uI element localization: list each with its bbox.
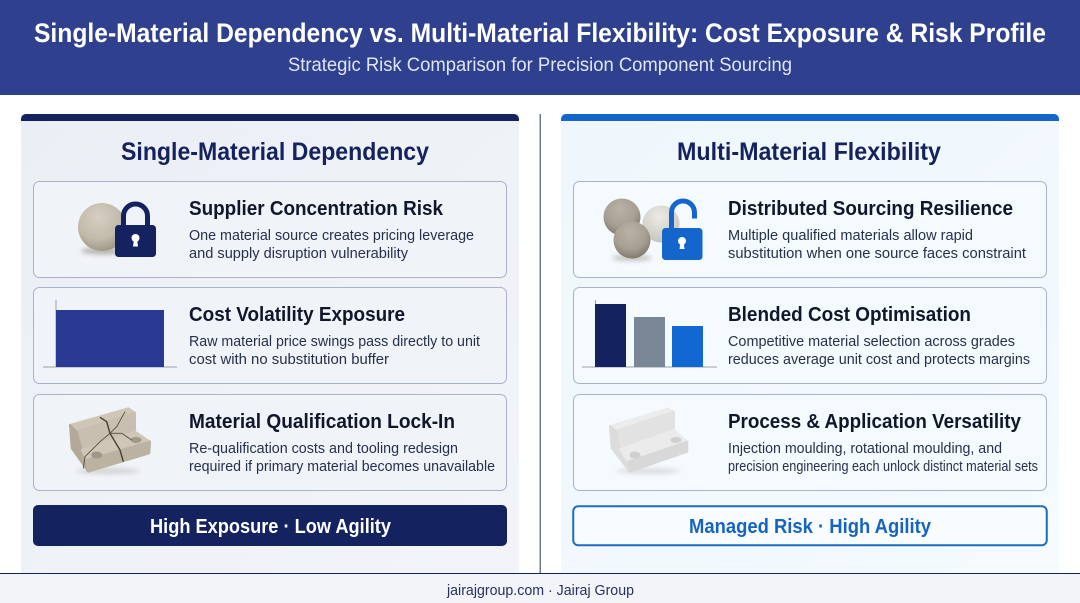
footer: jairajgroup.com · Jairaj Group [446, 583, 634, 599]
panel: single-material dependency [21, 114, 519, 573]
card description: reduces average unit cost and protects margins [728, 352, 1030, 368]
chart: single bar [43, 300, 177, 368]
status banner: managed risk [573, 506, 1047, 545]
card description: precision engineering each unlock distinct material sets [728, 459, 1038, 475]
icon: white bracket [610, 408, 687, 474]
status banner: managed risk: Managed Risk · High Agility [689, 515, 932, 538]
card title: Supplier Concentration Risk [189, 198, 444, 220]
card description: Competitive material selection across grades [728, 334, 1015, 350]
card description: cost with no substitution buffer [189, 352, 389, 368]
card: material qualification lock-in [34, 394, 506, 490]
card: blended cost optimisation [574, 288, 1046, 384]
status banner: high exposure [33, 505, 507, 546]
card description: and supply disruption vulnerability [189, 246, 409, 262]
panel heading: multi-material: Multi-Material Flexibility [677, 138, 941, 166]
chart: three descending bars [582, 300, 717, 368]
card description: Raw material price swings pass directly to unit [189, 334, 480, 350]
card description [189, 228, 474, 262]
card: distributed sourcing resilience [574, 182, 1046, 278]
card description [728, 334, 1030, 368]
card title: Material Qualification Lock-In [189, 411, 455, 433]
card description: Multiple qualified materials allow rapid [728, 228, 973, 244]
card description: Injection moulding, rotational moulding, and [728, 441, 1002, 457]
card description [728, 441, 1038, 475]
card description [728, 228, 1026, 262]
card title: Cost Volatility Exposure [189, 304, 405, 326]
card description: substitution when one source faces constraint [728, 246, 1026, 262]
footer [0, 573, 1080, 603]
card: cost volatility exposure [34, 288, 506, 384]
subtitle: Strategic Risk Comparison for Precision Component Sourcing [288, 54, 792, 76]
card description: Re-qualification costs and tooling redesign [189, 441, 458, 457]
card title: Process & Application Versatility [728, 411, 1022, 433]
panel: multi-material flexibility [561, 114, 1059, 573]
panel heading: single-material: Single-Material Dependency [121, 138, 429, 166]
icon: spheres with open padlock [604, 198, 702, 261]
card description [189, 441, 495, 475]
card: process and application versatility [574, 394, 1046, 490]
card description [189, 334, 480, 368]
status banner: high exposure: High Exposure · Low Agility [150, 515, 392, 538]
centre divider [540, 114, 541, 573]
card description: One material source creates pricing leverage [189, 228, 474, 244]
card: supplier concentration risk [34, 182, 506, 278]
header banner [0, 0, 1080, 95]
icon: sphere with closed padlock [78, 203, 156, 257]
icon: cracked bracket [70, 408, 150, 474]
card title: Distributed Sourcing Resilience [728, 198, 1013, 220]
card title: Blended Cost Optimisation [728, 304, 971, 326]
card description: required if primary material becomes unavailable [189, 459, 495, 475]
